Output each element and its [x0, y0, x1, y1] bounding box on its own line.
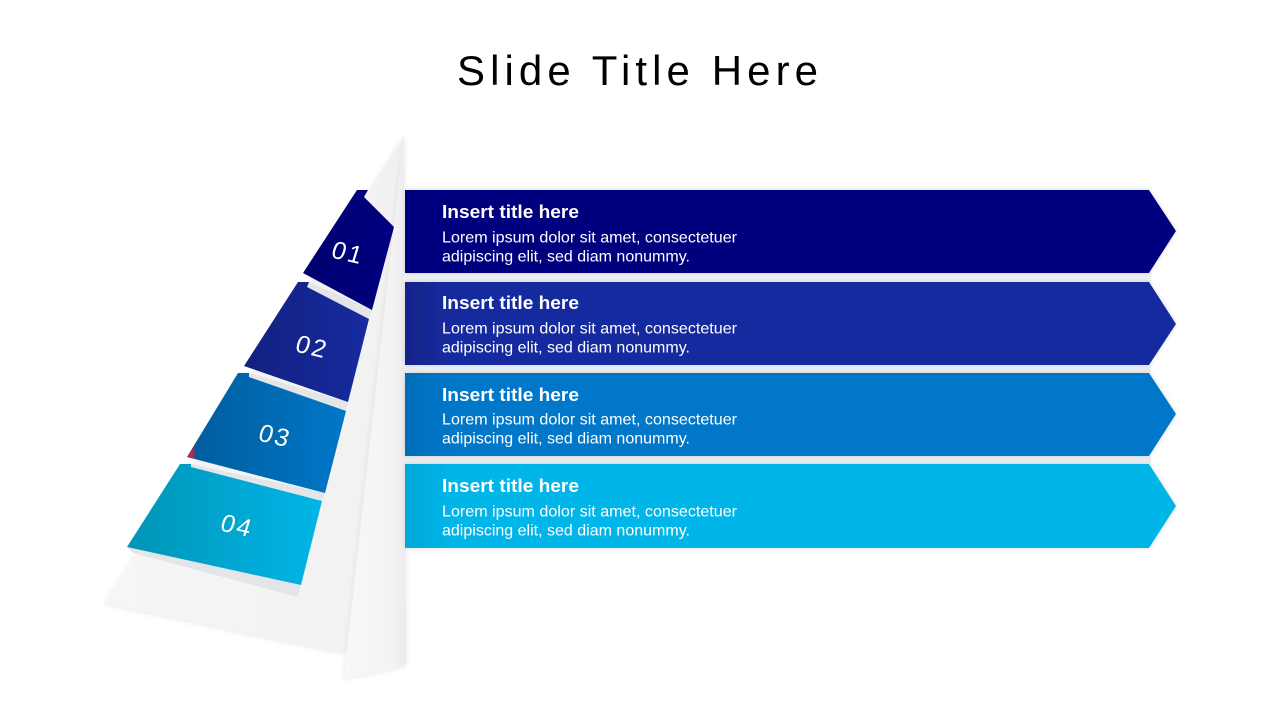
- banner 03: Lorem ipsum dolor sit amet, consectetuer: [442, 412, 738, 428]
- banner 01: [405, 190, 1176, 273]
- red corner accent: [187, 445, 196, 459]
- banner 03: [405, 373, 1176, 456]
- segment shadows: [127, 282, 372, 597]
- segment 04: 04: [217, 509, 255, 543]
- banner 04: [405, 464, 1176, 548]
- segment 03: 03: [255, 419, 293, 453]
- banner 04: adipiscing elit, sed diam nonummy.: [442, 522, 690, 540]
- banner 02: Insert title here: [442, 293, 579, 313]
- banner 02: adipiscing elit, sed diam nonummy.: [442, 340, 690, 356]
- segment 02: [244, 282, 369, 402]
- title: Slide Title Here: [457, 47, 818, 94]
- banner gaps: [405, 273, 1151, 464]
- pyramid front fold: [344, 136, 406, 678]
- pyramid back face: [105, 136, 404, 653]
- segment 02: 02: [292, 330, 330, 364]
- banner 03: Insert title here: [442, 385, 579, 405]
- banner 01: Insert title here: [442, 202, 579, 222]
- segment 04: [127, 464, 322, 585]
- banner 01: adipiscing elit, sed diam nonummy.: [442, 248, 690, 266]
- banner 04: Lorem ipsum dolor sit amet, consectetuer: [442, 504, 738, 520]
- banner 03: adipiscing elit, sed diam nonummy.: [442, 430, 690, 448]
- segment 01: 01: [328, 236, 366, 270]
- banner 01: Lorem ipsum dolor sit amet, consectetuer: [442, 230, 738, 246]
- banner 02: Lorem ipsum dolor sit amet, consectetuer: [442, 320, 738, 338]
- segment 01: [303, 190, 394, 310]
- segment 03: [187, 373, 346, 493]
- pyramid graphic: [105, 136, 406, 678]
- banner 04: Insert title here: [442, 476, 579, 496]
- banner 02: [405, 282, 1176, 365]
